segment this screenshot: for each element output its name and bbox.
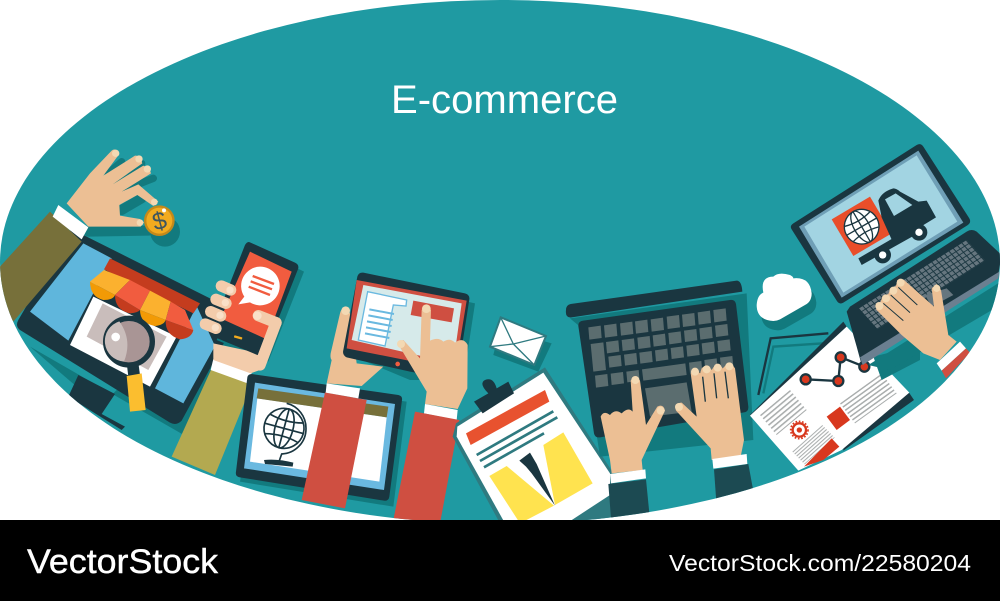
globe tablet [236, 374, 402, 501]
tablet, tablet hands and mail scene [236, 273, 613, 523]
globe tablet shadow [240, 401, 406, 506]
report document [750, 322, 914, 471]
document on tablet [358, 292, 407, 346]
keyboard body [578, 300, 748, 437]
right hand on keyboard [675, 362, 744, 460]
red bar [804, 438, 839, 467]
keyboard shadow [570, 293, 753, 457]
monitor shadow [30, 343, 236, 434]
keyboard keys [859, 240, 985, 329]
store front [70, 297, 177, 387]
envelope [490, 317, 552, 372]
left blue screen panel [30, 243, 112, 341]
cuff [53, 205, 88, 239]
cloud [757, 274, 816, 330]
globe [263, 408, 305, 450]
text blocks [760, 390, 807, 435]
red sleeve left [302, 392, 367, 508]
laptop hinge bar [566, 281, 742, 317]
phone fingers [205, 286, 276, 365]
keys [588, 308, 733, 417]
gear [791, 421, 808, 439]
monitor frame [17, 229, 240, 424]
awning [90, 258, 200, 339]
dark sleeves [608, 464, 755, 527]
phone shadow [216, 268, 304, 362]
bottom-right shadow [873, 345, 920, 380]
watermark logo text: VectorStock [27, 543, 219, 581]
monitor stand [68, 375, 125, 430]
cuff [937, 342, 966, 371]
monitor and store scene [0, 150, 304, 475]
coin: $ [150, 207, 170, 237]
red sleeve right [393, 412, 459, 523]
clipboard [453, 367, 613, 523]
keyboard laptop, hands and document scene [566, 274, 920, 527]
right blue screen panel [155, 306, 215, 403]
title: E-commerce [391, 78, 618, 122]
tablet [343, 273, 469, 380]
cuff [211, 359, 252, 384]
right tablet hand [397, 304, 468, 409]
coin [144, 205, 180, 247]
watermark bar [0, 520, 1000, 601]
cuffs [610, 454, 747, 483]
laptop screen [791, 144, 970, 303]
sleeve: olive left [0, 212, 82, 322]
left hand on keyboard [601, 376, 665, 473]
node graph [801, 352, 869, 386]
cuff [424, 404, 458, 420]
hand holding coin [67, 150, 158, 227]
red sleeve [942, 348, 970, 378]
red square [827, 407, 850, 430]
sleeve: olive light [172, 368, 252, 475]
illustration, clipped to ellipse [0, 144, 1000, 527]
truck [858, 188, 936, 265]
cuff [326, 383, 360, 398]
laptop hand [875, 279, 957, 360]
magnifying glass [105, 318, 152, 412]
wire stand [758, 333, 828, 395]
hand shadow [88, 162, 153, 232]
left tablet hand [327, 306, 383, 386]
watermark url: VectorStock.com/22580204 [669, 550, 971, 576]
delivery laptop scene [791, 144, 1000, 378]
tablet shadow [366, 302, 475, 380]
hand holding phone palm [213, 343, 259, 374]
laptop base [847, 230, 1000, 370]
phone [211, 242, 298, 355]
globe parcel [832, 197, 892, 256]
